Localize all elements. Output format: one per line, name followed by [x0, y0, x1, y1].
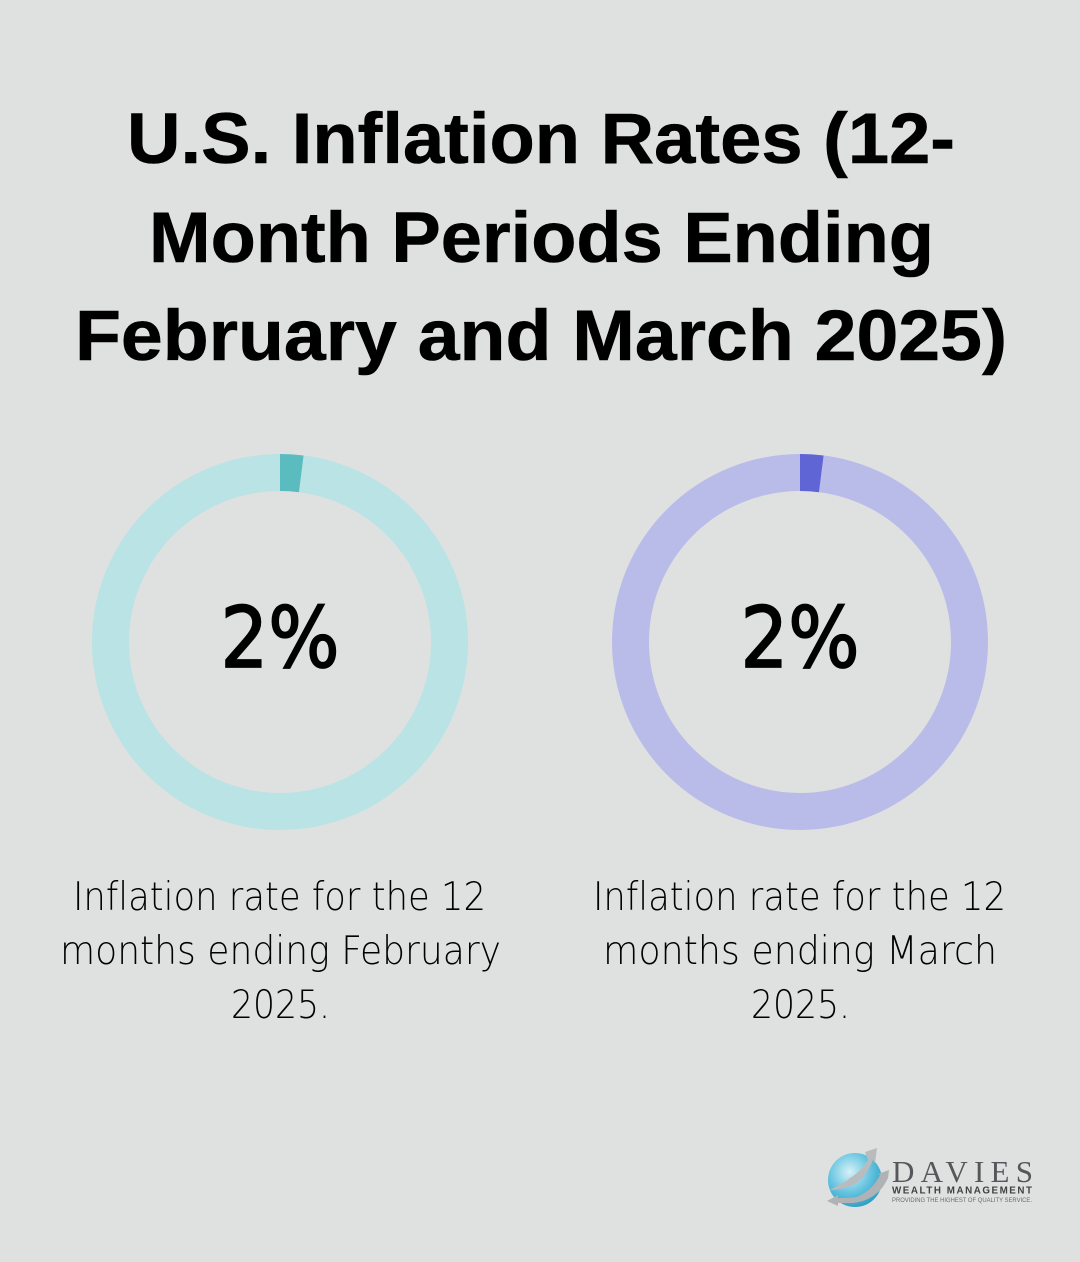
description: March: 2025.	[751, 983, 850, 1028]
title: U.S. Inflation Rates (12-	[127, 100, 955, 179]
title	[75, 100, 1007, 376]
title: Month Periods Ending	[149, 199, 934, 278]
description: February: 2025.	[231, 983, 330, 1028]
donut chart: February	[110, 454, 450, 812]
description: February	[60, 875, 501, 1028]
panel: February 2025 inflation	[60, 454, 501, 1028]
wordmark: DAVIES	[892, 1154, 1033, 1189]
value: March: 2%	[740, 589, 860, 687]
description: February: Inflation rate for the 12	[73, 875, 486, 920]
description: February: months ending February	[60, 929, 501, 974]
panel: March 2025 inflation	[593, 454, 1006, 1028]
description: March: Inflation rate for the 12	[593, 875, 1006, 920]
description: March: months ending March	[603, 929, 997, 974]
donut chart: March	[630, 454, 970, 812]
description: March	[593, 875, 1006, 1028]
icon: globe with arrows	[827, 1148, 889, 1207]
value: February: 2%	[220, 589, 340, 687]
logo: Davies Wealth Management	[827, 1148, 1033, 1207]
title: February and March 2025)	[75, 297, 1007, 376]
subtitle: WEALTH MANAGEMENT	[892, 1186, 1032, 1196]
tagline: PROVIDING THE HIGHEST OF QUALITY SERVICE.	[892, 1197, 1032, 1204]
